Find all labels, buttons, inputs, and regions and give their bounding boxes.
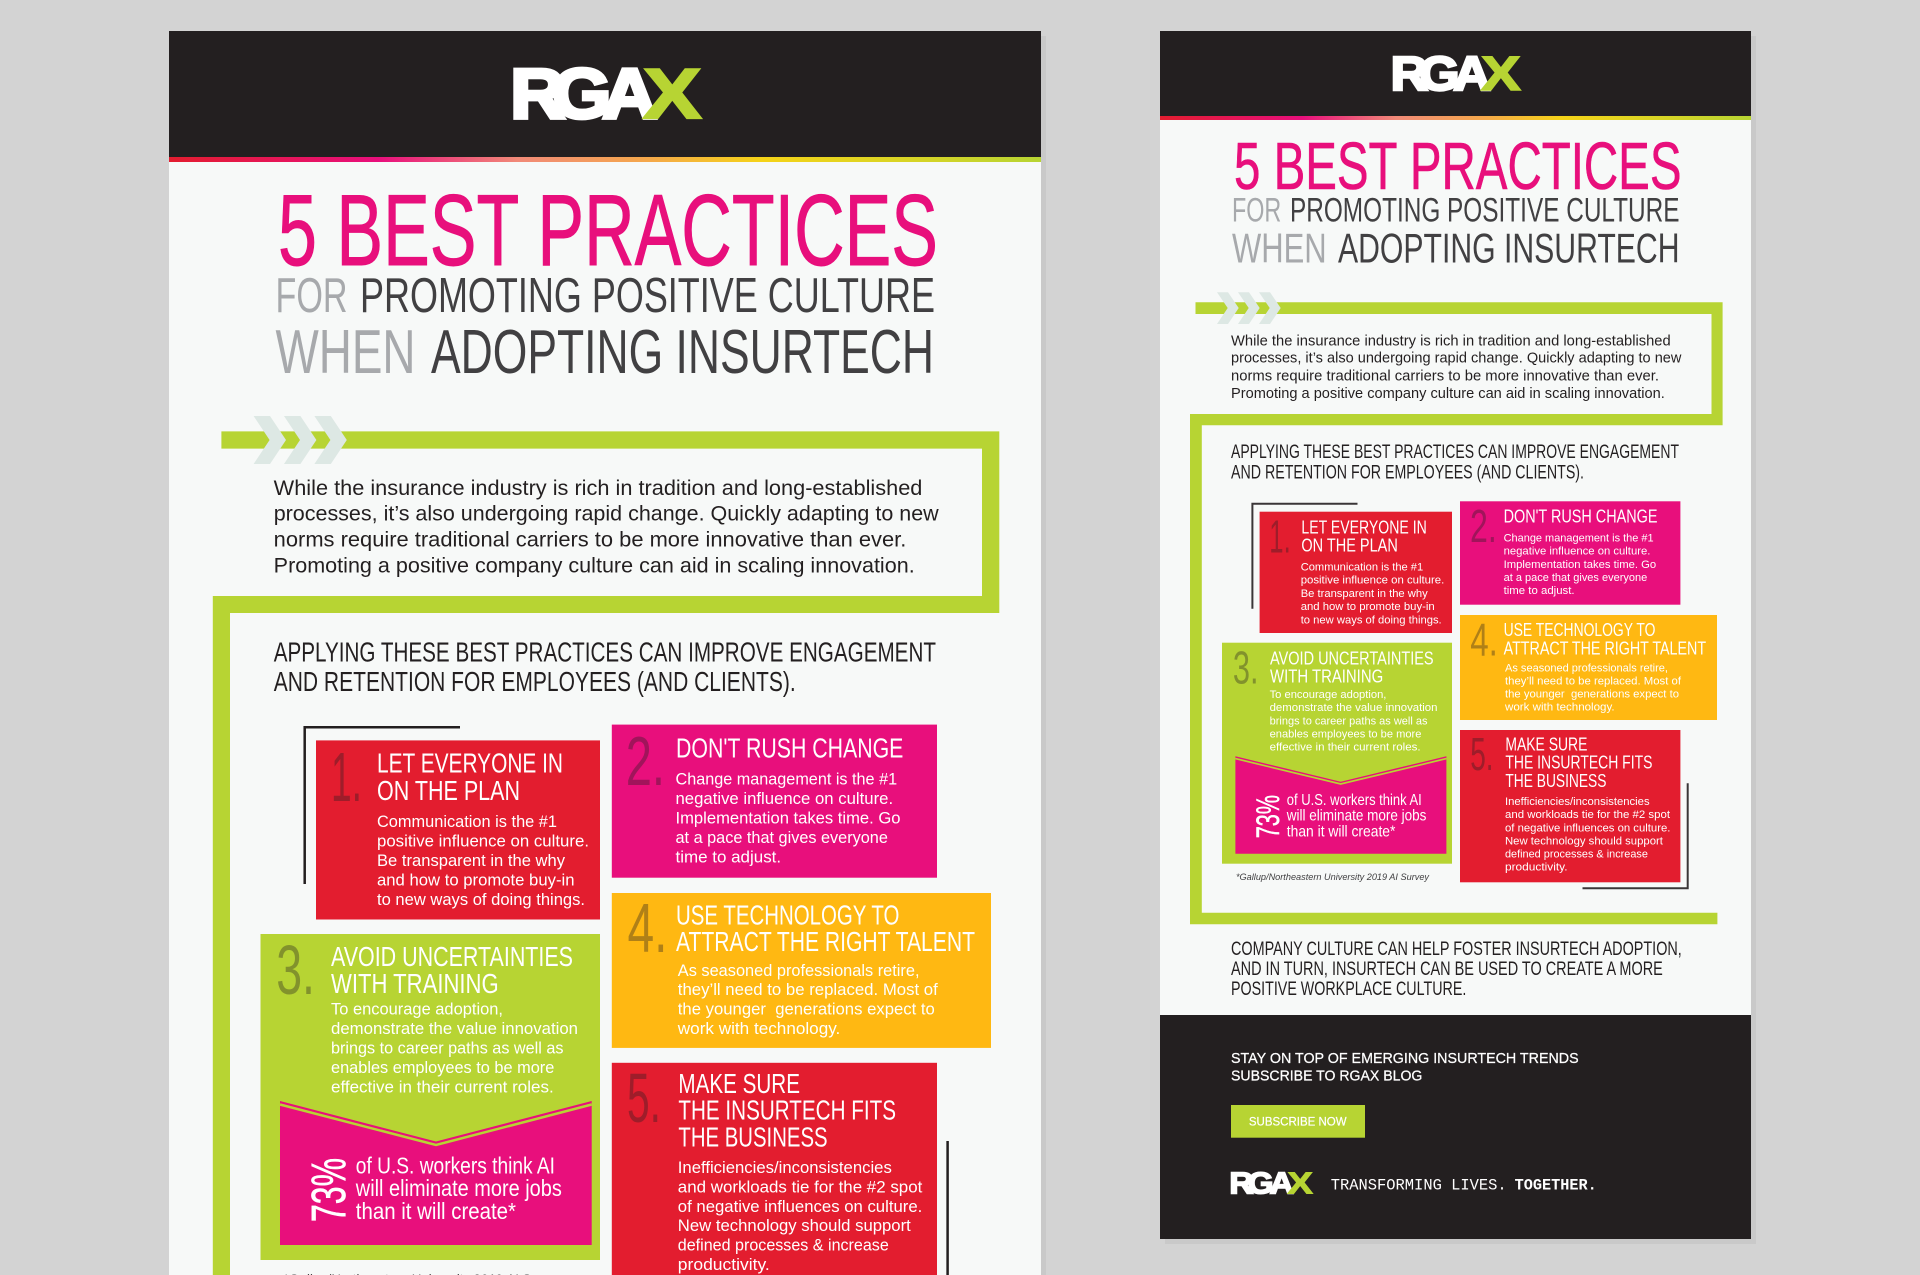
footer call to action text: SUBSCRIBE TO RGAX BLOG: [1231, 1067, 1422, 1084]
tagline: TOGETHER.: [1515, 1176, 1597, 1194]
card 1: let everyone in on the plan: ON THE PLAN: [377, 775, 520, 806]
stat callout: 73%: [1235, 756, 1446, 854]
card 4: use technology to attract the right talent: [1460, 613, 1717, 720]
card 1: let everyone in on the plan: Be transparent in the why: [1301, 588, 1428, 600]
chevrons: [1217, 292, 1281, 324]
card 5: make sure the insurtech fits the business: Inefficiencies/inconsistencies: [1505, 796, 1650, 808]
card 1: let everyone in on the plan: [316, 738, 600, 920]
intro paragraph: processes, it’s also undergoing rapid change. Quickly adapting to new: [1231, 351, 1682, 367]
card 2: don't rush change: 2.: [626, 722, 665, 800]
panel: large infographic preview: [169, 31, 1046, 1275]
card 4: use technology to attract the right talent: USE TECHNOLOGY TO: [1504, 619, 1655, 640]
stat callout: 73%: than it will create*: [1287, 823, 1395, 840]
stat callout: 73%: of U.S. workers think AI: [356, 1152, 555, 1178]
card 3: avoid uncertainties with training: enables employees to be more: [1270, 728, 1421, 740]
logo: RGAX: RGA: [510, 54, 657, 133]
subscribe button: SUBSCRIBE NOW: [1249, 1116, 1347, 1128]
card 5: make sure the insurtech fits the business: defined processes & increase: [678, 1236, 889, 1255]
card 5: make sure the insurtech fits the business: THE INSURTECH FITS: [678, 1094, 896, 1126]
card 4: use technology to attract the right talent: the younger generations expect to: [1505, 689, 1679, 701]
green frame: [213, 431, 999, 1275]
card 1: let everyone in on the plan: positive influence on culture.: [1301, 575, 1444, 587]
card 3: avoid uncertainties with training: enables employees to be more: [331, 1058, 554, 1077]
card 2: don't rush change: at a pace that gives everyone: [676, 828, 888, 847]
intro paragraph: norms require traditional carriers to be more innovative than ever.: [274, 528, 906, 552]
intro paragraph: Promoting a positive company culture can aid in scaling innovation.: [274, 554, 915, 578]
card 2: don't rush change: time to adjust.: [676, 847, 781, 866]
title: [276, 175, 938, 387]
card 3: avoid uncertainties with training: demonstrate the value innovation: [331, 1019, 578, 1038]
intro paragraph: Promoting a positive company culture can aid in scaling innovation.: [1231, 386, 1665, 402]
footer call to action text: STAY ON TOP OF EMERGING INSURTECH TRENDS: [1231, 1050, 1579, 1067]
intro paragraph: norms require traditional carriers to be more innovative than ever.: [1231, 368, 1659, 384]
title: PROMOTING POSITIVE CULTURE: [360, 269, 935, 323]
title: ADOPTING INSURTECH: [431, 318, 934, 387]
card 5: make sure the insurtech fits the business: defined processes & increase: [1505, 849, 1648, 861]
card 3: avoid uncertainties with training: WITH TRAINING: [1270, 666, 1383, 687]
card 4: use technology to attract the right talent: they’ll need to be replaced. Most of: [1505, 675, 1682, 687]
card 1: let everyone in on the plan: to new ways of doing things.: [377, 890, 585, 909]
closing statement: [1231, 939, 1682, 1000]
card 4: use technology to attract the right talent: As seasoned professionals retire,: [678, 961, 920, 980]
card 5: make sure the insurtech fits the business: 5.: [627, 1059, 661, 1137]
footer panel: [1160, 1015, 1751, 1239]
card 1: let everyone in on the plan: and how to promote buy-in: [1301, 601, 1435, 613]
rainbow gradient strip: [1160, 116, 1751, 120]
card 5: make sure the insurtech fits the business: [612, 1059, 937, 1275]
card 4: use technology to attract the right talent: ATTRACT THE RIGHT TALENT: [1504, 638, 1706, 659]
card 2: don't rush change: negative influence on culture.: [676, 789, 893, 808]
card 3: avoid uncertainties with training: effective in their current roles.: [1270, 741, 1421, 753]
rainbow gradient strip: [169, 157, 1041, 162]
intro paragraph: While the insurance industry is rich in tradition and long-established: [274, 476, 922, 500]
card 4: use technology to attract the right talent: work with technology.: [1504, 702, 1615, 714]
intro paragraph: [274, 476, 939, 578]
card 5: make sure the insurtech fits the business: New technology should support: [678, 1216, 911, 1235]
logo: RGAX: X: [643, 54, 701, 133]
card 4: use technology to attract the right talent: they’ll need to be replaced. Most of: [678, 980, 938, 999]
card 4: use technology to attract the right talent: 4.: [1470, 613, 1498, 665]
card 3: avoid uncertainties with training: AVOID UNCERTAINTIES: [1270, 647, 1434, 668]
green frame: [1190, 302, 1723, 924]
card 3: avoid uncertainties with training: brings to career paths as well as: [1270, 715, 1428, 727]
card 2: don't rush change: Implementation takes time. Go: [1504, 559, 1656, 571]
card 1: let everyone in on the plan: LET EVERYONE IN: [377, 747, 563, 778]
card 5: make sure the insurtech fits the business: productivity.: [1505, 862, 1568, 874]
card 2: don't rush change: DON'T RUSH CHANGE: [676, 732, 903, 764]
card 4: use technology to attract the right talent: the younger generations expect to: [678, 1000, 935, 1019]
subscribe button: [1231, 1105, 1365, 1138]
stat callout: 73%: than it will create*: [356, 1198, 516, 1224]
stat callout: 73%: of U.S. workers think AI: [1287, 792, 1422, 809]
title: [1232, 129, 1682, 272]
card 5: make sure the insurtech fits the business: [1460, 728, 1680, 882]
stat callout: 73%: 73%: [1250, 795, 1286, 838]
card 5: make sure the insurtech fits the business: and workloads tie for the #2 spot: [1505, 809, 1671, 821]
logo: RGAX: X: [1481, 47, 1521, 100]
title: 5 BEST PRACTICES: [278, 175, 938, 287]
card 3: avoid uncertainties with training: To encourage adoption,: [1270, 689, 1386, 701]
corner bracket lower right: [946, 1141, 949, 1275]
card 1: let everyone in on the plan: to new ways of doing things.: [1301, 614, 1442, 626]
corner bracket: [1252, 504, 1358, 609]
stat callout: 73%: [280, 1101, 592, 1245]
card 5: make sure the insurtech fits the business: of negative influences on culture.: [1505, 822, 1670, 834]
card 1: let everyone in on the plan: [1260, 511, 1452, 633]
card 5: make sure the insurtech fits the business: THE BUSINESS: [678, 1122, 828, 1153]
stat callout: 73%: will eliminate more jobs: [355, 1175, 562, 1201]
card 1: let everyone in on the plan: Communication is the #1: [1301, 562, 1423, 574]
card 4: use technology to attract the right talent: USE TECHNOLOGY TO: [676, 899, 899, 930]
card 5: make sure the insurtech fits the business: THE INSURTECH FITS: [1505, 752, 1652, 773]
card 3: avoid uncertainties with training: WITH TRAINING: [331, 968, 499, 999]
title: FOR: [276, 269, 348, 323]
card 5: make sure the insurtech fits the business: 5.: [1470, 728, 1494, 780]
footer logo: X: [1288, 1165, 1314, 1200]
intro paragraph: [1231, 333, 1682, 402]
card 2: don't rush change: time to adjust.: [1504, 585, 1575, 597]
card 4: use technology to attract the right talent: [612, 889, 991, 1048]
subheading: AND RETENTION FOR EMPLOYEES (AND CLIENTS).: [274, 666, 796, 697]
corner bracket lower right: [1582, 783, 1688, 888]
card 2: don't rush change: at a pace that gives everyone: [1504, 572, 1647, 584]
card 1: let everyone in on the plan: Communication is the #1: [377, 812, 557, 831]
footer logo: RGA: [1229, 1165, 1294, 1200]
card 1: let everyone in on the plan: positive influence on culture.: [377, 832, 589, 851]
logo: RGAX: RGA: [1391, 47, 1491, 100]
subheading: [1231, 442, 1679, 484]
subheading: APPLYING THESE BEST PRACTICES CAN IMPROVE ENGAGEMENT: [1231, 442, 1679, 463]
footer call to action text: [1231, 1050, 1579, 1084]
card 5: make sure the insurtech fits the business: Inefficiencies/inconsistencies: [678, 1158, 892, 1177]
card 1: let everyone in on the plan: LET EVERYONE IN: [1301, 516, 1427, 537]
title: ADOPTING INSURTECH: [1338, 225, 1680, 272]
card 2: don't rush change: Change management is the #1: [1504, 533, 1654, 545]
header bar: [169, 31, 1041, 157]
card 5: make sure the insurtech fits the business: productivity.: [678, 1255, 770, 1274]
intro paragraph: While the insurance industry is rich in tradition and long-established: [1231, 333, 1671, 349]
card 1: let everyone in on the plan: ON THE PLAN: [1301, 535, 1398, 556]
tagline: [1331, 1176, 1597, 1194]
card 2: don't rush change: [612, 722, 937, 878]
card 2: don't rush change: [1460, 500, 1680, 605]
card 2: don't rush change: 2.: [1470, 500, 1497, 552]
title: WHEN: [1232, 225, 1327, 272]
card 5: make sure the insurtech fits the business: THE BUSINESS: [1505, 770, 1606, 791]
corner bracket: [305, 727, 460, 884]
closing statement: COMPANY CULTURE CAN HELP FOSTER INSURTECH ADOPTION,: [1231, 939, 1682, 960]
card 1: let everyone in on the plan: Be transparent in the why: [377, 851, 565, 870]
card 1: let everyone in on the plan: 1.: [331, 738, 362, 816]
card 3: avoid uncertainties with training: demonstrate the value innovation: [1270, 702, 1438, 714]
card 1: let everyone in on the plan: and how to promote buy-in: [377, 870, 574, 889]
card 3: avoid uncertainties with training: AVOID UNCERTAINTIES: [331, 941, 573, 972]
panel: full infographic preview: [1160, 31, 1756, 1244]
card 3: avoid uncertainties with training: [1222, 641, 1452, 864]
card 5: make sure the insurtech fits the business: MAKE SURE: [1505, 733, 1587, 754]
card 5: make sure the insurtech fits the business: MAKE SURE: [678, 1068, 800, 1099]
card 4: use technology to attract the right talent: As seasoned professionals retire,: [1505, 662, 1668, 674]
card 2: don't rush change: negative influence on culture.: [1504, 546, 1650, 558]
card 2: don't rush change: Change management is the #1: [676, 770, 897, 789]
closing statement: AND IN TURN, INSURTECH CAN BE USED TO CREATE A MORE: [1231, 959, 1663, 980]
card 4: use technology to attract the right talent: work with technology.: [677, 1019, 840, 1038]
card 2: don't rush change: DON'T RUSH CHANGE: [1504, 506, 1658, 527]
header bar: [1160, 31, 1751, 116]
card 3: avoid uncertainties with training: To encourage adoption,: [331, 1000, 503, 1019]
tagline: TRANSFORMING LIVES.: [1331, 1176, 1507, 1194]
footnote: *Gallup/Northeastern University 2019 AI Survey: [1236, 872, 1430, 883]
stat callout: 73%: will eliminate more jobs: [1286, 808, 1427, 825]
card 1: let everyone in on the plan: 1.: [1269, 511, 1291, 563]
title: FOR: [1232, 192, 1281, 230]
card 3: avoid uncertainties with training: [260, 931, 600, 1260]
intro paragraph: processes, it’s also undergoing rapid change. Quickly adapting to new: [274, 502, 939, 526]
card 5: make sure the insurtech fits the business: of negative influences on culture.: [678, 1197, 922, 1216]
card 5: make sure the insurtech fits the business: New technology should support: [1505, 835, 1664, 847]
title: WHEN: [276, 318, 416, 387]
subheading: [274, 636, 936, 697]
card 4: use technology to attract the right talent: ATTRACT THE RIGHT TALENT: [676, 926, 975, 957]
chevrons: [254, 416, 347, 464]
card 3: avoid uncertainties with training: 3.: [1233, 641, 1259, 693]
card 3: avoid uncertainties with training: brings to career paths as well as: [331, 1038, 564, 1058]
title: PROMOTING POSITIVE CULTURE: [1290, 192, 1680, 230]
card 5: make sure the insurtech fits the business: and workloads tie for the #2 spot: [678, 1177, 923, 1196]
card 3: avoid uncertainties with training: effective in their current roles.: [331, 1077, 554, 1096]
card 3: avoid uncertainties with training: 3.: [276, 931, 315, 1009]
subheading: APPLYING THESE BEST PRACTICES CAN IMPROVE ENGAGEMENT: [274, 636, 936, 668]
title: 5 BEST PRACTICES: [1234, 129, 1682, 204]
card 2: don't rush change: Implementation takes time. Go: [676, 808, 900, 828]
subheading: AND RETENTION FOR EMPLOYEES (AND CLIENTS).: [1231, 463, 1584, 484]
stat callout: 73%: 73%: [303, 1158, 356, 1222]
card 4: use technology to attract the right talent: 4.: [628, 889, 668, 967]
closing statement: POSITIVE WORKPLACE CULTURE.: [1231, 979, 1466, 1000]
